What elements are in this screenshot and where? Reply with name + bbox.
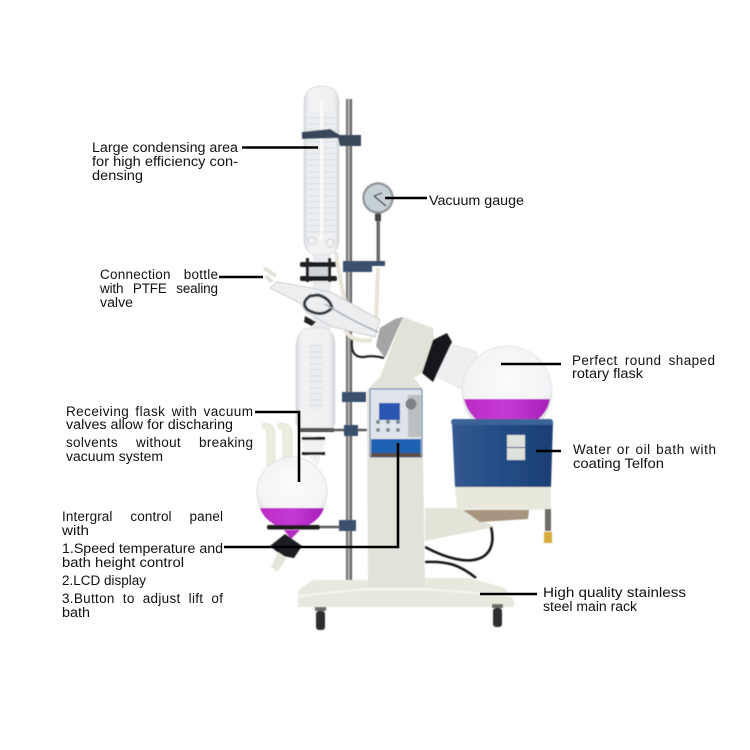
vertical support rod <box>346 99 352 591</box>
label: control panel <box>61 509 223 620</box>
label: water or oil bath <box>573 442 716 471</box>
vacuum gauge <box>362 182 394 262</box>
lower condenser <box>296 328 335 432</box>
rotary flask collar <box>422 333 452 382</box>
condenser stem and flange joint <box>300 255 337 330</box>
label: main rack <box>543 585 686 614</box>
label: condensing area <box>92 140 239 183</box>
base plate <box>298 578 514 607</box>
label: water or oil bath: Water or oil bath with <box>573 442 716 457</box>
label: control panel: 1.Speed temperature and <box>62 541 223 556</box>
caster wheels <box>315 604 503 630</box>
rotary flask neck <box>436 344 477 392</box>
black power cable at head <box>352 340 384 358</box>
upper condenser <box>304 86 339 255</box>
black cables <box>425 527 492 578</box>
rotary flask <box>462 346 552 436</box>
control panel <box>370 389 422 457</box>
arm between column and bath <box>425 508 495 541</box>
leader lines <box>219 148 561 594</box>
label: water or oil bath: coating Telfon <box>573 456 664 471</box>
label: control panel: bath height control <box>62 555 184 570</box>
label: rotary flask <box>572 353 715 381</box>
label: rotary flask: Perfect round shaped <box>572 353 715 368</box>
label: receiving flask: solvents without breaking <box>66 435 253 450</box>
label: connection bottle: valve <box>100 295 133 310</box>
apparatus: rotary evaporator <box>257 86 553 630</box>
rod clamps <box>339 392 366 531</box>
diagonal vapor tube with connection bottle <box>264 268 380 337</box>
bottom discharge valve <box>270 534 302 572</box>
label: receiving flask: valves allow for discharing <box>66 417 233 432</box>
label: condensing area: Large condensing area <box>92 140 239 155</box>
label: control panel: 2.LCD display <box>62 573 146 588</box>
label: control panel: bath <box>62 605 90 620</box>
vacuum tubes <box>336 252 378 341</box>
label: condensing area: densing <box>92 168 143 183</box>
label: main rack: steel main rack <box>543 599 637 614</box>
label: main rack: High quality stainless <box>543 585 686 600</box>
head collar <box>376 317 403 358</box>
label: connection bottle: Connection bottle <box>100 267 218 282</box>
gauge bracket <box>343 261 385 272</box>
label: receiving flask <box>66 404 253 464</box>
label: control panel: with <box>61 523 89 538</box>
water bath <box>451 419 553 543</box>
receiving flask <box>257 423 327 539</box>
label: control panel: 3.Button to adjust lift of <box>62 591 223 606</box>
label: receiving flask: Receiving flask with vacuum <box>66 404 253 419</box>
label: connection bottle: with PTFE sealing <box>99 281 218 296</box>
upper condenser clamp <box>302 129 361 146</box>
label: vacuum gauge: Vacuum gauge <box>429 193 524 208</box>
label: condensing area: for high efficiency con- <box>92 154 238 169</box>
label: rotary flask: rotary flask <box>572 366 643 381</box>
label: receiving flask: vacuum system <box>66 449 163 464</box>
label: control panel: Intergral control panel <box>62 509 223 524</box>
main column and head <box>367 317 434 588</box>
label: connection bottle <box>99 267 218 310</box>
